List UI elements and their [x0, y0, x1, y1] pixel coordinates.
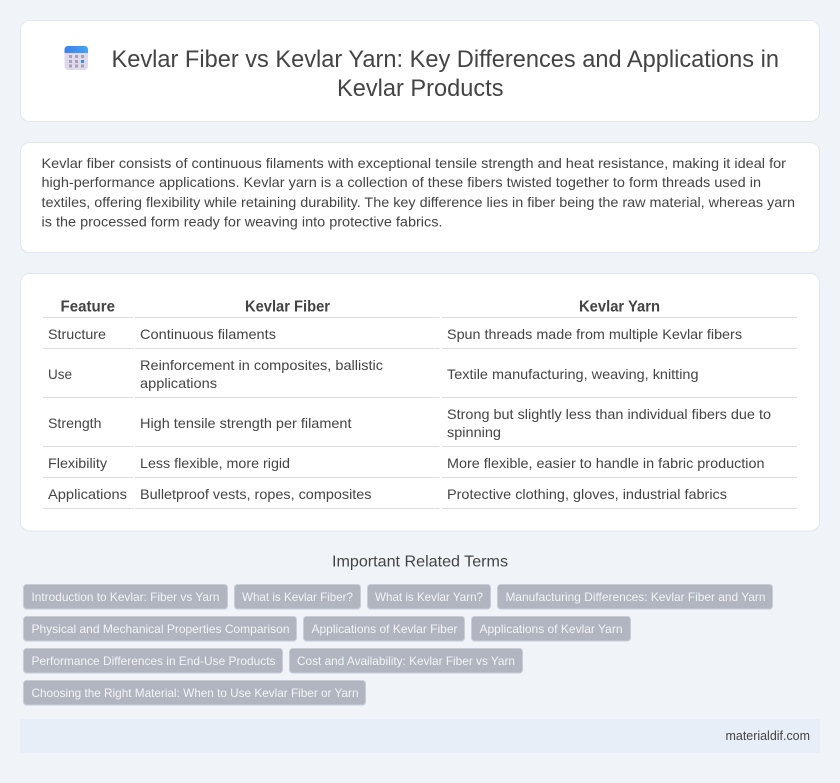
tag	[290, 648, 522, 673]
row: applications: Bulletproof vests, ropes, composites	[140, 486, 372, 502]
panel: summary paragraph: textiles, offering flexibility while retaining durability. The key difference lies in fiber being the raw material, whereas yarn	[42, 194, 795, 210]
row: use: Reinforcement in composites, ballistic	[140, 357, 383, 373]
table header row: Feature	[60, 298, 115, 316]
icon: calendar	[64, 46, 88, 70]
panel: summary paragraph: is the processed form ready for weaving into protective fabrics.	[42, 214, 442, 230]
row: structure	[48, 326, 742, 342]
row: flexibility: Flexibility	[48, 455, 107, 471]
tag: Applications of Kevlar Yarn	[480, 622, 622, 636]
tag list: related terms	[24, 584, 772, 705]
panel: comparison table	[20, 274, 820, 531]
tag: Manufacturing Differences: Kevlar Fiber and Yarn	[506, 590, 766, 604]
row: flexibility: Less flexible, more rigid	[140, 455, 290, 471]
tag: Cost and Availability: Kevlar Fiber vs Yarn	[297, 654, 515, 668]
row: applications: Applications	[48, 486, 127, 502]
tag	[498, 584, 772, 609]
row: structure: Continuous filaments	[140, 326, 276, 342]
table header row	[60, 298, 660, 316]
row: structure: Spun threads made from multiple Kevlar fibers	[447, 326, 742, 342]
row: strength: spinning	[447, 424, 501, 440]
row: use	[48, 357, 698, 391]
panel: summary paragraph	[20, 142, 820, 252]
table header row: Kevlar Fiber	[245, 298, 330, 316]
row: applications	[48, 486, 727, 502]
row: use: applications	[140, 375, 217, 391]
heading: related terms: Important Related Terms	[332, 554, 508, 570]
row: applications: Protective clothing, gloves, industrial fabrics	[447, 486, 727, 502]
tag	[234, 584, 360, 609]
tag	[472, 616, 630, 641]
title: Kevlar Fiber vs Kevlar Yarn: Key Differences and Applications in	[112, 46, 779, 73]
tag	[368, 584, 490, 609]
row: flexibility	[48, 455, 764, 471]
footer	[20, 719, 820, 753]
footer: materialdif.com	[726, 729, 810, 743]
tag: Physical and Mechanical Properties Comparison	[32, 622, 290, 636]
row: flexibility: More flexible, easier to handle in fabric production	[447, 455, 764, 471]
row: strength: High tensile strength per filament	[140, 415, 352, 431]
tag	[24, 616, 296, 641]
row: structure: Structure	[48, 326, 106, 342]
panel: header	[20, 20, 820, 122]
tag: Choosing the Right Material: When to Use Kevlar Fiber or Yarn	[32, 686, 358, 700]
tag: Introduction to Kevlar: Fiber vs Yarn	[32, 590, 220, 604]
tag	[24, 648, 282, 673]
panel: summary paragraph: Kevlar fiber consists of continuous filaments with exceptional tensile strength and heat resistance, making it ideal for	[42, 155, 786, 171]
tag	[24, 584, 228, 609]
tag	[24, 680, 366, 705]
panel: summary paragraph: high-performance applications. Kevlar yarn is a collection of these fibers twisted together to form threads used in	[42, 174, 761, 190]
title: Kevlar Products	[337, 75, 504, 102]
table header row: Kevlar Yarn	[579, 298, 660, 316]
row: strength	[48, 406, 771, 440]
title	[112, 46, 779, 102]
row: use: Textile manufacturing, weaving, knitting	[447, 366, 698, 382]
tag: Performance Differences in End-Use Products	[32, 654, 276, 668]
tag	[304, 616, 464, 641]
row: strength: Strong but slightly less than individual fibers due to	[447, 406, 771, 422]
row: use: Use	[48, 366, 72, 382]
row: strength: Strength	[48, 415, 102, 431]
tag: Applications of Kevlar Fiber	[312, 622, 458, 636]
tag: What is Kevlar Fiber?	[242, 590, 353, 604]
tag: What is Kevlar Yarn?	[375, 590, 483, 604]
